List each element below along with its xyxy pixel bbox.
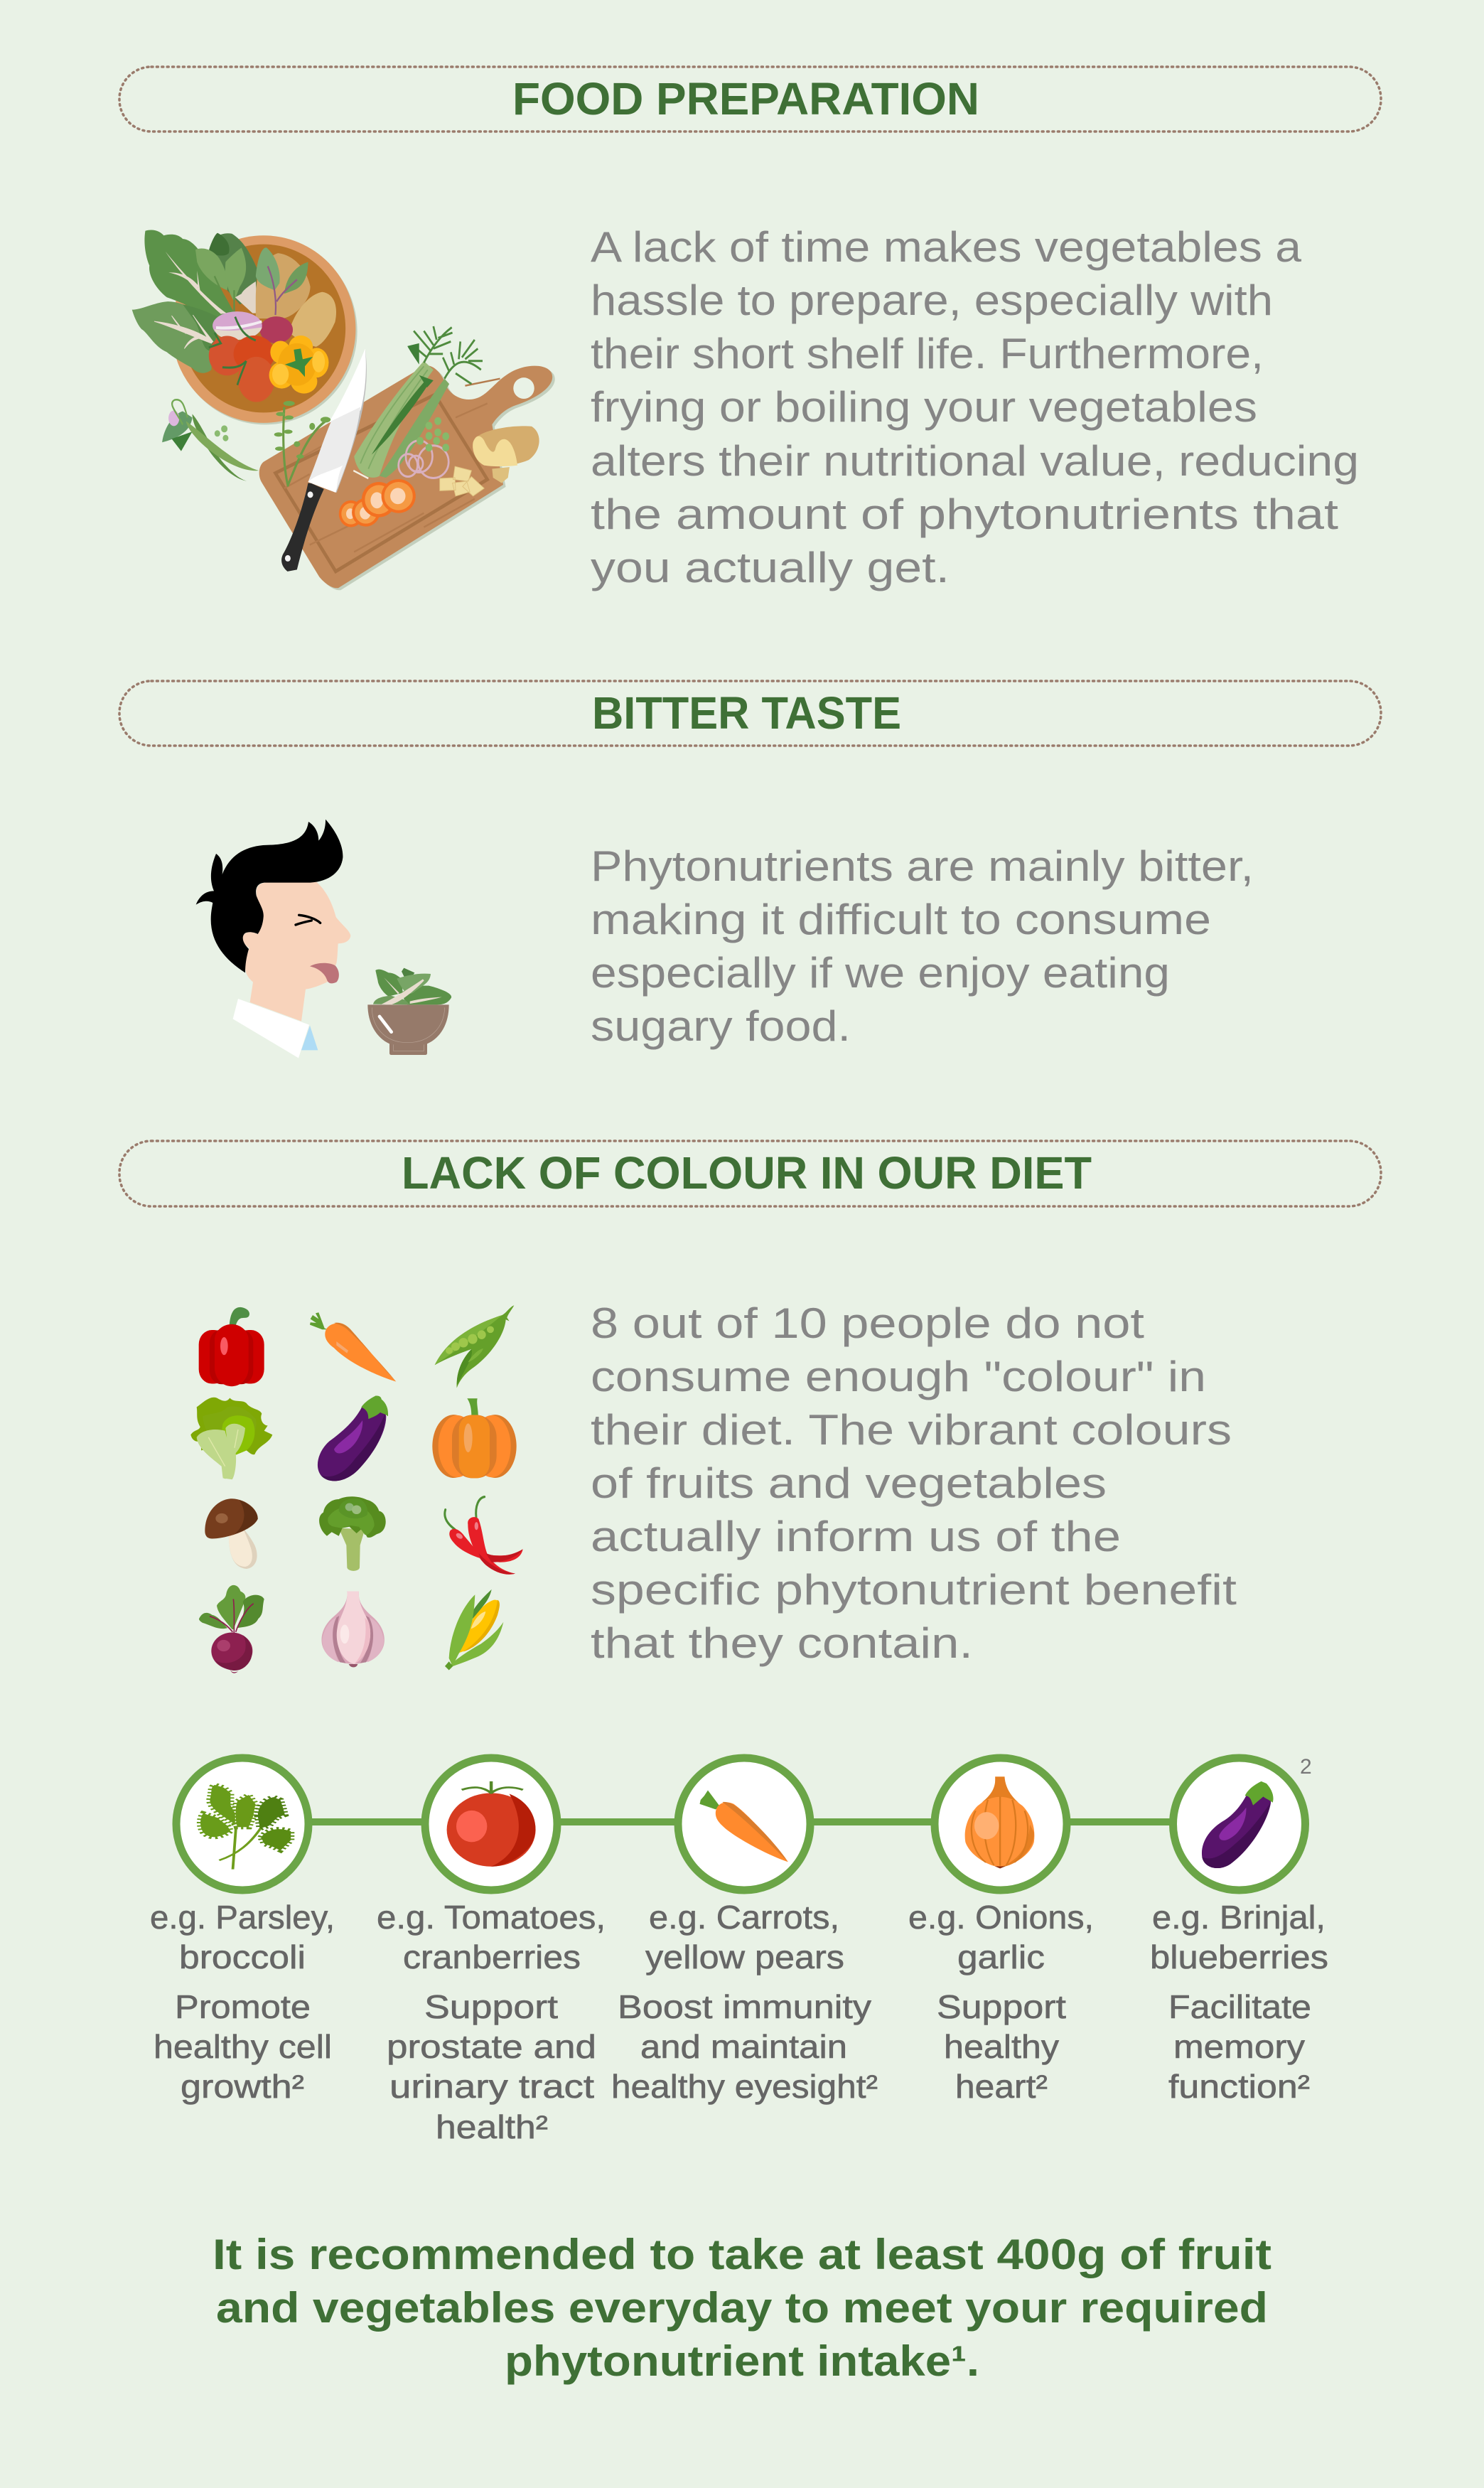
icon: tomatoes [209, 317, 275, 402]
labels: carrots [611, 1899, 878, 2105]
labels: brinjal [1150, 1899, 1328, 2105]
heading: food preparation [119, 67, 1381, 132]
labels: carrots: yellow pears [645, 1939, 844, 1975]
body text: bitter taste: sugary food. [591, 1002, 851, 1050]
labels: tomatoes: cranberries [403, 1939, 581, 1975]
labels: tomatoes [377, 1899, 606, 2145]
labels: brinjal: function² [1168, 2068, 1310, 2105]
heading: bitter taste: BITTER TASTE [592, 687, 901, 739]
icon: cutting board [259, 365, 555, 590]
circle: carrot [678, 1758, 810, 1890]
labels: carrots: healthy eyesight² [611, 2068, 878, 2105]
icon: onion rings [399, 441, 448, 478]
body text: lack of colour: of fruits and vegetables [591, 1459, 1107, 1507]
illustration: grid of twelve vegetables [190, 1305, 523, 1673]
circle: eggplant [1173, 1758, 1305, 1890]
labels: tomatoes: prostate and [387, 2028, 596, 2065]
icon: chili peppers [445, 1497, 523, 1575]
icon: salad leaves [132, 230, 257, 373]
icon: eggplant [1202, 1781, 1274, 1868]
body text: lack of colour: consume enough "colour" in [591, 1353, 1206, 1400]
icon: herb sprig [274, 401, 330, 486]
labels: onions: healthy [944, 2028, 1059, 2065]
icon: potatoes and beetroot [256, 247, 336, 347]
illustration: bowl of vegetables and cutting board [132, 230, 555, 590]
labels: parsley: broccoli [179, 1939, 306, 1975]
labels: carrots: e.g. Carrots, [649, 1899, 839, 1936]
body text: lack of colour: 8 out of 10 people do not [591, 1299, 1144, 1347]
icon: broccoli [319, 1496, 386, 1571]
illustration: man tasting bitter greens [196, 820, 451, 1058]
icon: mushroom [205, 1498, 258, 1569]
labels: onions [908, 1899, 1094, 2105]
body text: bitter taste: especially if we enjoy eating [591, 949, 1170, 997]
labels: tomatoes: urinary tract [389, 2068, 594, 2105]
body text: food preparation: the amount of phytonutrients that [591, 490, 1338, 538]
labels: onions: garlic [957, 1939, 1045, 1975]
circle: parsley [176, 1758, 308, 1890]
labels: brinjal: blueberries [1150, 1939, 1328, 1975]
body text: bitter taste [591, 842, 1254, 1050]
icon: onion [965, 1776, 1034, 1868]
body text: lack of colour [591, 1299, 1237, 1667]
icon: green peas [416, 417, 449, 451]
icon: beetroot [199, 1585, 264, 1673]
closing recommendation: and vegetables everyday to meet your required [216, 2284, 1268, 2332]
body text: lack of colour: their diet. The vibrant colours [591, 1406, 1232, 1454]
icon: pumpkin [432, 1398, 517, 1478]
labels: parsley: Promote [175, 1988, 311, 2025]
icon: celery [353, 326, 483, 478]
labels: tomatoes: health² [436, 2108, 548, 2145]
labels: onions: e.g. Onions, [908, 1899, 1094, 1936]
icon: wooden bowl [172, 235, 357, 424]
body text: food preparation: their short shelf life. Furthermore, [591, 330, 1264, 377]
icon: turnip [213, 311, 262, 340]
icon: yellow pepper [269, 336, 328, 394]
labels: onions: Support [937, 1988, 1066, 2025]
closing recommendation [213, 2231, 1271, 2385]
icon: eggplant [318, 1395, 388, 1481]
icon: carrot [699, 1791, 788, 1862]
labels: tomatoes: Support [424, 1988, 558, 2025]
icon: celery fronds [414, 326, 483, 384]
labels: parsley [150, 1899, 335, 2105]
labels: brinjal: Facilitate [1168, 1988, 1311, 2025]
body text: food preparation: A lack of time makes vegetables a [591, 223, 1302, 271]
labels: parsley: healthy cell [154, 2028, 332, 2065]
body text: food preparation: frying or boiling your vegetables [591, 383, 1257, 431]
icon: potato chunks [440, 426, 539, 496]
icon: bowl of greens [367, 968, 451, 1055]
icon: knife [281, 348, 367, 572]
icon: corn [445, 1589, 503, 1670]
icon: shirt collar [233, 999, 318, 1058]
icon: garlic [321, 1591, 385, 1667]
heading: bitter taste [119, 681, 1381, 746]
labels: brinjal: e.g. Brinjal, [1152, 1899, 1326, 1936]
heading: lack of colour: LACK OF COLOUR IN OUR DIET [402, 1147, 1092, 1199]
body text: lack of colour: actually inform us of the [591, 1513, 1121, 1560]
labels: brinjal: memory [1173, 2028, 1305, 2065]
icon: man's head [196, 820, 350, 1022]
icon: pea pod [435, 1305, 514, 1388]
icon: parsley [200, 1785, 291, 1870]
body text: bitter taste: making it difficult to consume [591, 896, 1211, 943]
body text: lack of colour: that they contain. [591, 1619, 973, 1667]
body text: bitter taste: Phytonutrients are mainly bitter, [591, 842, 1254, 890]
labels: carrots: Boost immunity [618, 1988, 871, 2025]
labels: parsley: growth² [181, 2068, 304, 2105]
timeline connector line [242, 1818, 1237, 1825]
labels: onions: heart² [955, 2068, 1048, 2105]
icon: red pepper [199, 1307, 264, 1386]
heading: food preparation: FOOD PREPARATION [512, 73, 979, 124]
labels: carrots: and maintain [640, 2028, 847, 2065]
heading: lack of colour [119, 1141, 1381, 1206]
footnote marker: 2 [1300, 1755, 1312, 1779]
icon: lettuce [190, 1398, 272, 1479]
body text: food preparation: hassle to prepare, especially with [591, 277, 1273, 324]
body text: lack of colour: specific phytonutrient benefit [591, 1566, 1237, 1614]
icon: pea pods and leaves [162, 400, 259, 481]
closing recommendation: phytonutrient intake¹. [505, 2337, 979, 2385]
body text: food preparation: alters their nutritional value, reducing [591, 437, 1359, 485]
icon: carrot slices [339, 479, 416, 527]
closing recommendation: It is recommended to take at least 400g of fruit [213, 2231, 1271, 2278]
labels: parsley: e.g. Parsley, [150, 1899, 335, 1936]
icon: carrot [310, 1312, 396, 1382]
body text: food preparation: you actually get. [591, 544, 950, 591]
icon: tomato [447, 1781, 536, 1867]
circle: onion [935, 1758, 1067, 1890]
labels: tomatoes: e.g. Tomatoes, [377, 1899, 606, 1936]
body text: food preparation [591, 223, 1359, 591]
circle: tomato [425, 1758, 557, 1890]
